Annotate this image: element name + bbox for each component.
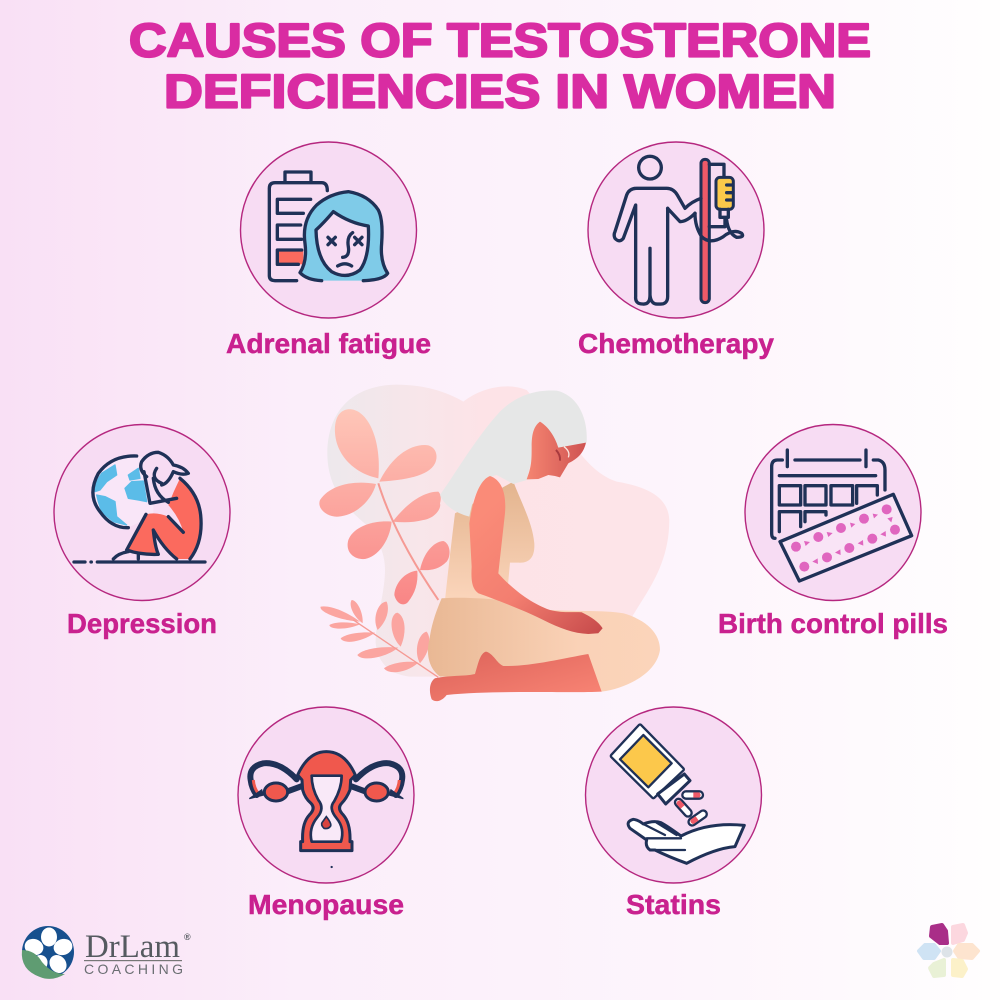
registered mark: ® bbox=[184, 932, 191, 942]
logo: DrLam Coaching bbox=[22, 926, 191, 979]
face bbox=[527, 422, 586, 479]
title: CAUSES OF TESTOSTERONE bbox=[129, 14, 871, 68]
large plant bbox=[319, 409, 450, 604]
logo emblem bbox=[22, 926, 75, 979]
panel: birth control pills bbox=[718, 424, 948, 639]
label: Menopause bbox=[248, 889, 404, 920]
legs bbox=[428, 598, 660, 692]
logo tagline: COACHING bbox=[84, 961, 183, 977]
icon: pill bottle and hand bbox=[612, 726, 744, 863]
label: Chemotherapy bbox=[578, 328, 774, 359]
circle bbox=[745, 424, 921, 600]
icon: patient with IV drip bbox=[614, 156, 743, 304]
circle bbox=[54, 424, 230, 600]
central illustration: kneeling woman bbox=[319, 385, 669, 701]
circle bbox=[240, 142, 416, 318]
logo wordmark: DrLam bbox=[85, 929, 180, 965]
title: DEFICIENCIES IN WOMEN bbox=[164, 66, 836, 118]
hair bbox=[440, 390, 587, 517]
icon: battery and tired face bbox=[269, 172, 388, 281]
icon: calendar and pill pack bbox=[772, 450, 912, 581]
circle bbox=[238, 707, 414, 883]
panel: depression bbox=[54, 424, 230, 639]
label: Birth control pills bbox=[718, 608, 948, 639]
small plant bbox=[320, 600, 429, 672]
torso bbox=[445, 482, 534, 600]
background blob bbox=[327, 385, 669, 677]
panel: statins bbox=[586, 707, 762, 920]
icon: uterus with hourglass bbox=[249, 752, 403, 868]
title bbox=[129, 14, 871, 118]
panel: chemotherapy bbox=[578, 142, 774, 359]
circle bbox=[586, 707, 762, 883]
arm bbox=[469, 476, 603, 634]
label: Depression bbox=[67, 608, 217, 639]
watermark flower bbox=[919, 925, 978, 976]
label: Statins bbox=[626, 889, 721, 920]
label: Adrenal fatigue bbox=[226, 328, 431, 359]
panel: adrenal fatigue bbox=[226, 142, 431, 359]
icon: sad woman with globe bbox=[74, 452, 205, 562]
foot and lower leg bbox=[430, 652, 602, 701]
panel: menopause bbox=[238, 707, 414, 920]
circle bbox=[588, 142, 764, 318]
